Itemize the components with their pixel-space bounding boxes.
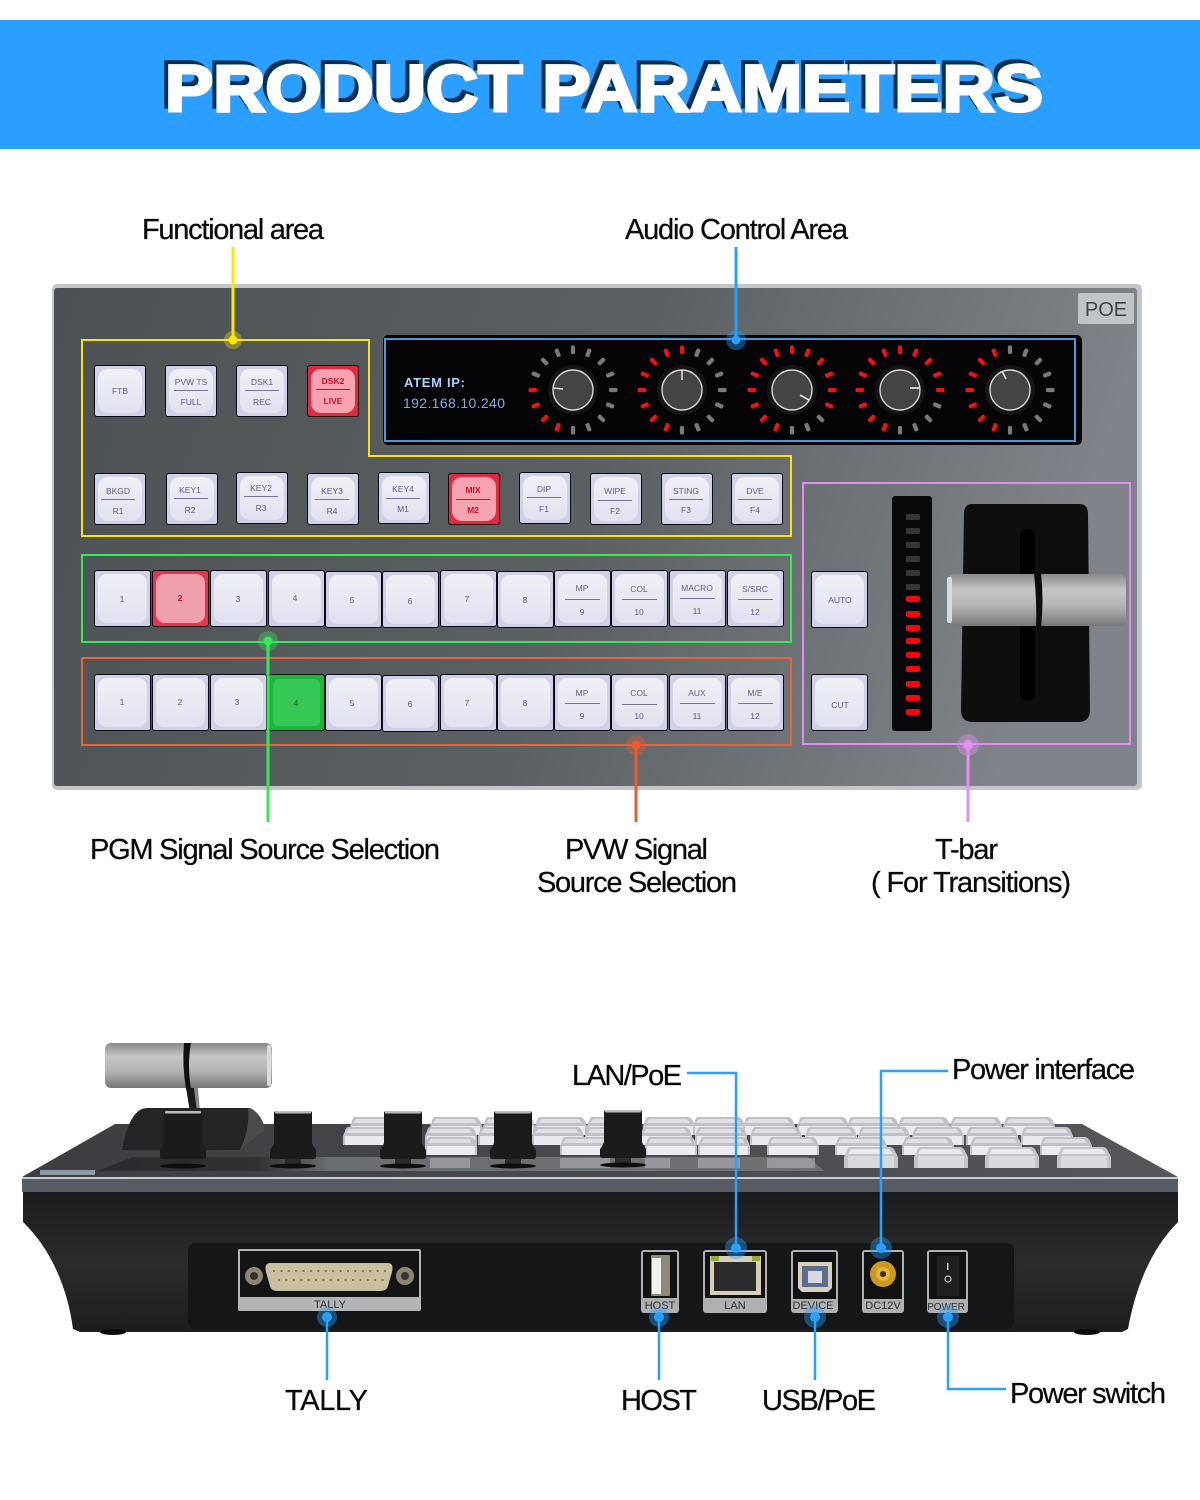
- knob 5: [966, 346, 1054, 434]
- PGM 3: [210, 570, 267, 627]
- PVW AUX 11: [669, 674, 726, 731]
- audio display: [383, 335, 1082, 445]
- PVW MP 9: [554, 674, 611, 731]
- deck: [22, 1124, 1178, 1177]
- key KEY2 / R3: R3: [256, 503, 267, 513]
- PGM 4: [268, 570, 325, 627]
- highlight: functional area: [82, 340, 791, 536]
- key WIPE / F2: F2: [610, 506, 620, 516]
- key DSK2 / LIVE: [307, 365, 359, 417]
- PGM 6: 6: [408, 596, 413, 606]
- POWER switch: POWER: [927, 1302, 965, 1313]
- AUTO key: [811, 571, 868, 628]
- rear knob 4: [490, 1111, 536, 1168]
- DC12V port: DC12V: [865, 1300, 901, 1312]
- control panel top view: [52, 284, 1142, 790]
- label: Power interface: Power interface: [952, 1054, 1135, 1086]
- pointer: HOST: [649, 1307, 669, 1380]
- PGM 1: 1: [120, 594, 125, 604]
- PVW 3: [210, 674, 267, 731]
- key STING / F3: F3: [681, 505, 691, 515]
- PGM 8: [497, 571, 554, 628]
- AUTO key: AUTO: [828, 595, 852, 605]
- key PVW TS / FULL: PVW TS: [175, 377, 208, 387]
- PVW 1: [94, 674, 151, 731]
- pointer: TALLY: [317, 1307, 337, 1380]
- key DSK1 / REC: [236, 365, 288, 417]
- PGM COL 10: COL: [630, 584, 648, 594]
- highlight: PVW: [82, 658, 791, 745]
- PVW 8: 8: [523, 698, 528, 708]
- label: HOST: HOST: [621, 1385, 697, 1417]
- pointer: LAN/PoE: [687, 1073, 747, 1259]
- PVW 1: 1: [120, 697, 125, 707]
- PGM 5: 5: [350, 595, 355, 605]
- label: T-bar for transitions: T-bar: [935, 834, 998, 866]
- PVW MP 9: 9: [580, 711, 585, 721]
- knob 4: [856, 346, 944, 434]
- chassis: [23, 1192, 1178, 1332]
- PVW COL 10: [611, 674, 668, 731]
- pointer: Audio Control Area: [726, 247, 746, 350]
- key KEY1 / R2: R2: [185, 505, 196, 515]
- label: PVW Signal Source Selection: [537, 834, 737, 899]
- CUT key: CUT: [831, 700, 849, 710]
- key KEY4 / M1: [378, 472, 430, 524]
- POE badge: [1078, 293, 1134, 324]
- rear key bank: [343, 1117, 1111, 1168]
- key MIX / M2: M2: [467, 505, 479, 515]
- CUT key: [811, 674, 868, 731]
- PVW key row: [94, 674, 784, 732]
- key DIP / F1: [519, 472, 571, 524]
- key FTB: FTB: [112, 386, 128, 396]
- PGM MACRO 11: MACRO: [681, 583, 713, 593]
- POWER switch: [927, 1250, 968, 1313]
- key KEY3 / R4: [307, 473, 359, 525]
- front strip: [22, 1177, 1178, 1192]
- PVW 4: 4: [294, 698, 299, 708]
- key KEY1 / R2: KEY1: [179, 485, 201, 495]
- label: USB/PoE: USB/PoE: [762, 1385, 876, 1417]
- rear knob 5: [600, 1110, 646, 1168]
- PGM MP 9: [554, 570, 611, 627]
- PGM MACRO 11: [669, 570, 726, 627]
- label: TALLY: TALLY: [285, 1385, 368, 1417]
- rear view device: [22, 1043, 1178, 1335]
- PGM 7: [440, 570, 497, 627]
- PGM S/SRC 12: 12: [750, 607, 760, 617]
- key FTB: [94, 365, 146, 417]
- label: PVW Signal Source Selection: Source Selection: [537, 867, 737, 899]
- label: T-bar for transitions: ( For Transitions): [871, 867, 1071, 899]
- HOST port: [641, 1250, 679, 1313]
- PVW AUX 11: 11: [693, 711, 702, 721]
- label: Audio Control Area: Audio Control Area: [625, 214, 849, 246]
- key KEY3 / R4: R4: [327, 506, 338, 516]
- DEVICE port: DEVICE: [793, 1300, 833, 1312]
- pointer: Functional area: [224, 247, 242, 349]
- PVW 8: [497, 674, 554, 731]
- key STING / F3: [661, 473, 713, 525]
- PGM MACRO 11: 11: [693, 606, 702, 616]
- ATEM IP text: [403, 375, 505, 411]
- DEVICE port: [791, 1250, 838, 1313]
- function keys: [94, 365, 783, 525]
- key STING / F3: STING: [673, 486, 699, 496]
- key WIPE / F2: [590, 473, 642, 525]
- highlight: PGM: [82, 555, 791, 642]
- PVW COL 10: COL: [630, 688, 648, 698]
- PGM MP 9: MP: [576, 583, 589, 593]
- feet: [100, 1329, 1100, 1335]
- key reflections: [430, 1158, 815, 1168]
- PVW 2: [152, 674, 209, 731]
- pointer: PGM: [258, 631, 278, 822]
- PGM 2: 2: [178, 593, 183, 603]
- PVW COL 10: 10: [634, 711, 644, 721]
- PGM S/SRC 12: S/SRC: [742, 584, 768, 594]
- title shadow: PRODUCT PARAMETERS: [161, 47, 1039, 121]
- PVW 4: [268, 674, 325, 731]
- LAN port: LAN: [724, 1300, 746, 1312]
- PGM 6: [382, 571, 439, 628]
- PGM key row: [94, 570, 784, 628]
- key DSK2 / LIVE: DSK2: [322, 376, 345, 386]
- PVW 7: 7: [465, 698, 470, 708]
- key PVW TS / FULL: FULL: [181, 397, 202, 407]
- glass band: [97, 1157, 824, 1171]
- pointer: Power interface: [870, 1071, 948, 1259]
- PVW MP 9: MP: [576, 688, 589, 698]
- label: T-bar for transitions: [871, 834, 1071, 899]
- title banner: [0, 20, 1200, 149]
- key KEY4 / M1: KEY4: [392, 484, 414, 494]
- level meter: [892, 496, 932, 731]
- pointer: T-bar: [957, 734, 979, 822]
- key DSK2 / LIVE: LIVE: [324, 396, 343, 406]
- key MIX / M2: MIX: [465, 485, 481, 495]
- DC12V port: [862, 1250, 904, 1313]
- key DSK1 / REC: DSK1: [251, 377, 273, 387]
- key DVE / F4: DVE: [746, 486, 764, 496]
- ATEM IP text: ATEM IP:: [404, 375, 465, 390]
- PGM 5: [325, 571, 382, 628]
- knob 1: [528, 346, 618, 434]
- ATEM IP text: 192.168.10.240: [403, 395, 505, 411]
- PVW M/E 12: M/E: [747, 688, 763, 698]
- T-bar: [947, 504, 1126, 722]
- title: PRODUCT PARAMETERS: [165, 51, 1043, 125]
- PVW M/E 12: [727, 674, 784, 731]
- highlight: T-bar: [803, 483, 1130, 744]
- pointer: USB/PoE: [804, 1306, 826, 1380]
- label: PVW Signal Source Selection: PVW Signal: [565, 834, 708, 866]
- label: Functional area: Functional area: [142, 214, 325, 246]
- HOST port: HOST: [645, 1300, 676, 1312]
- key BKGD / R1: R1: [113, 506, 124, 516]
- PVW 3: 3: [235, 697, 240, 707]
- PGM S/SRC 12: [727, 570, 784, 627]
- key KEY2 / R3: KEY2: [250, 483, 272, 493]
- PVW 7: [440, 674, 497, 731]
- label: LAN/PoE: LAN/PoE: [572, 1060, 682, 1092]
- knob 2: [638, 346, 726, 434]
- key DVE / F4: [731, 473, 783, 525]
- LAN port: [703, 1250, 767, 1313]
- knob 3: [748, 346, 836, 434]
- rear knob 2: [270, 1111, 316, 1168]
- PVW 2: 2: [178, 697, 183, 707]
- PGM 4: 4: [293, 593, 298, 603]
- T-bar handle rear: [105, 1043, 272, 1150]
- PGM 1: [94, 570, 151, 627]
- key KEY4 / M1: M1: [397, 504, 409, 514]
- key WIPE / F2: WIPE: [604, 486, 626, 496]
- TALLY port: [238, 1249, 421, 1311]
- pointer: PVW: [626, 735, 646, 822]
- key DIP / F1: DIP: [537, 484, 551, 494]
- pointer: Power switch: [937, 1306, 1006, 1389]
- rear knob 3: [380, 1111, 426, 1168]
- TALLY port: TALLY: [314, 1299, 347, 1311]
- rear knob 1: [160, 1111, 206, 1168]
- PGM COL 10: [611, 570, 668, 627]
- label: PGM Signal Source Selection: PGM Signal Source Selection: [90, 834, 440, 866]
- PGM 3: 3: [236, 594, 241, 604]
- PGM 2: [152, 570, 209, 627]
- label: Power switch: Power switch: [1010, 1378, 1166, 1410]
- PVW 6: [382, 675, 439, 732]
- key BKGD / R1: [94, 473, 146, 525]
- key KEY3 / R4: KEY3: [321, 486, 343, 496]
- PGM MP 9: 9: [580, 607, 585, 617]
- PVW 6: 6: [408, 699, 413, 709]
- POE badge: POE: [1085, 299, 1127, 321]
- PVW M/E 12: 12: [750, 711, 760, 721]
- key KEY2 / R3: [236, 472, 288, 524]
- PGM COL 10: 10: [634, 607, 644, 617]
- key DSK1 / REC: REC: [253, 397, 271, 407]
- highlight: audio control: [385, 339, 1075, 441]
- key PVW TS / FULL: [165, 365, 217, 417]
- key BKGD / R1: BKGD: [106, 486, 130, 496]
- PGM 8: 8: [523, 595, 528, 605]
- PGM 7: 7: [465, 594, 470, 604]
- key DIP / F1: F1: [539, 504, 549, 514]
- PVW 5: 5: [350, 698, 355, 708]
- rear recess: [188, 1243, 1014, 1329]
- key KEY1 / R2: [166, 473, 218, 525]
- PVW AUX 11: AUX: [688, 688, 706, 698]
- PVW 5: [325, 674, 382, 731]
- POE tag: [40, 1170, 95, 1175]
- key DVE / F4: F4: [750, 505, 760, 515]
- key MIX / M2: [448, 473, 500, 525]
